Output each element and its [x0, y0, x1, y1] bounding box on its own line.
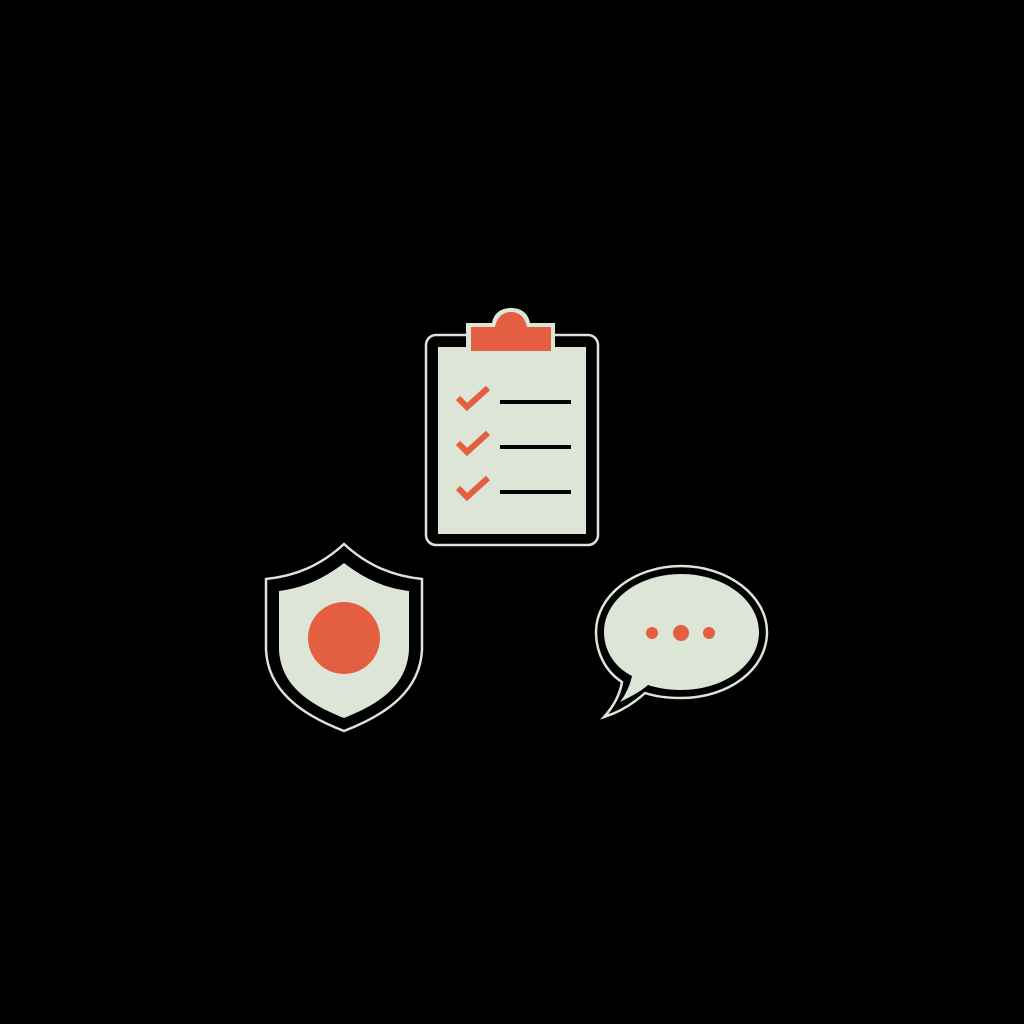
checklist items	[458, 388, 571, 497]
icon: shield	[266, 544, 422, 731]
icon: speech bubble	[596, 566, 767, 717]
clip	[466, 308, 555, 356]
typing dots	[646, 625, 715, 641]
icon: clipboard checklist	[426, 308, 598, 545]
